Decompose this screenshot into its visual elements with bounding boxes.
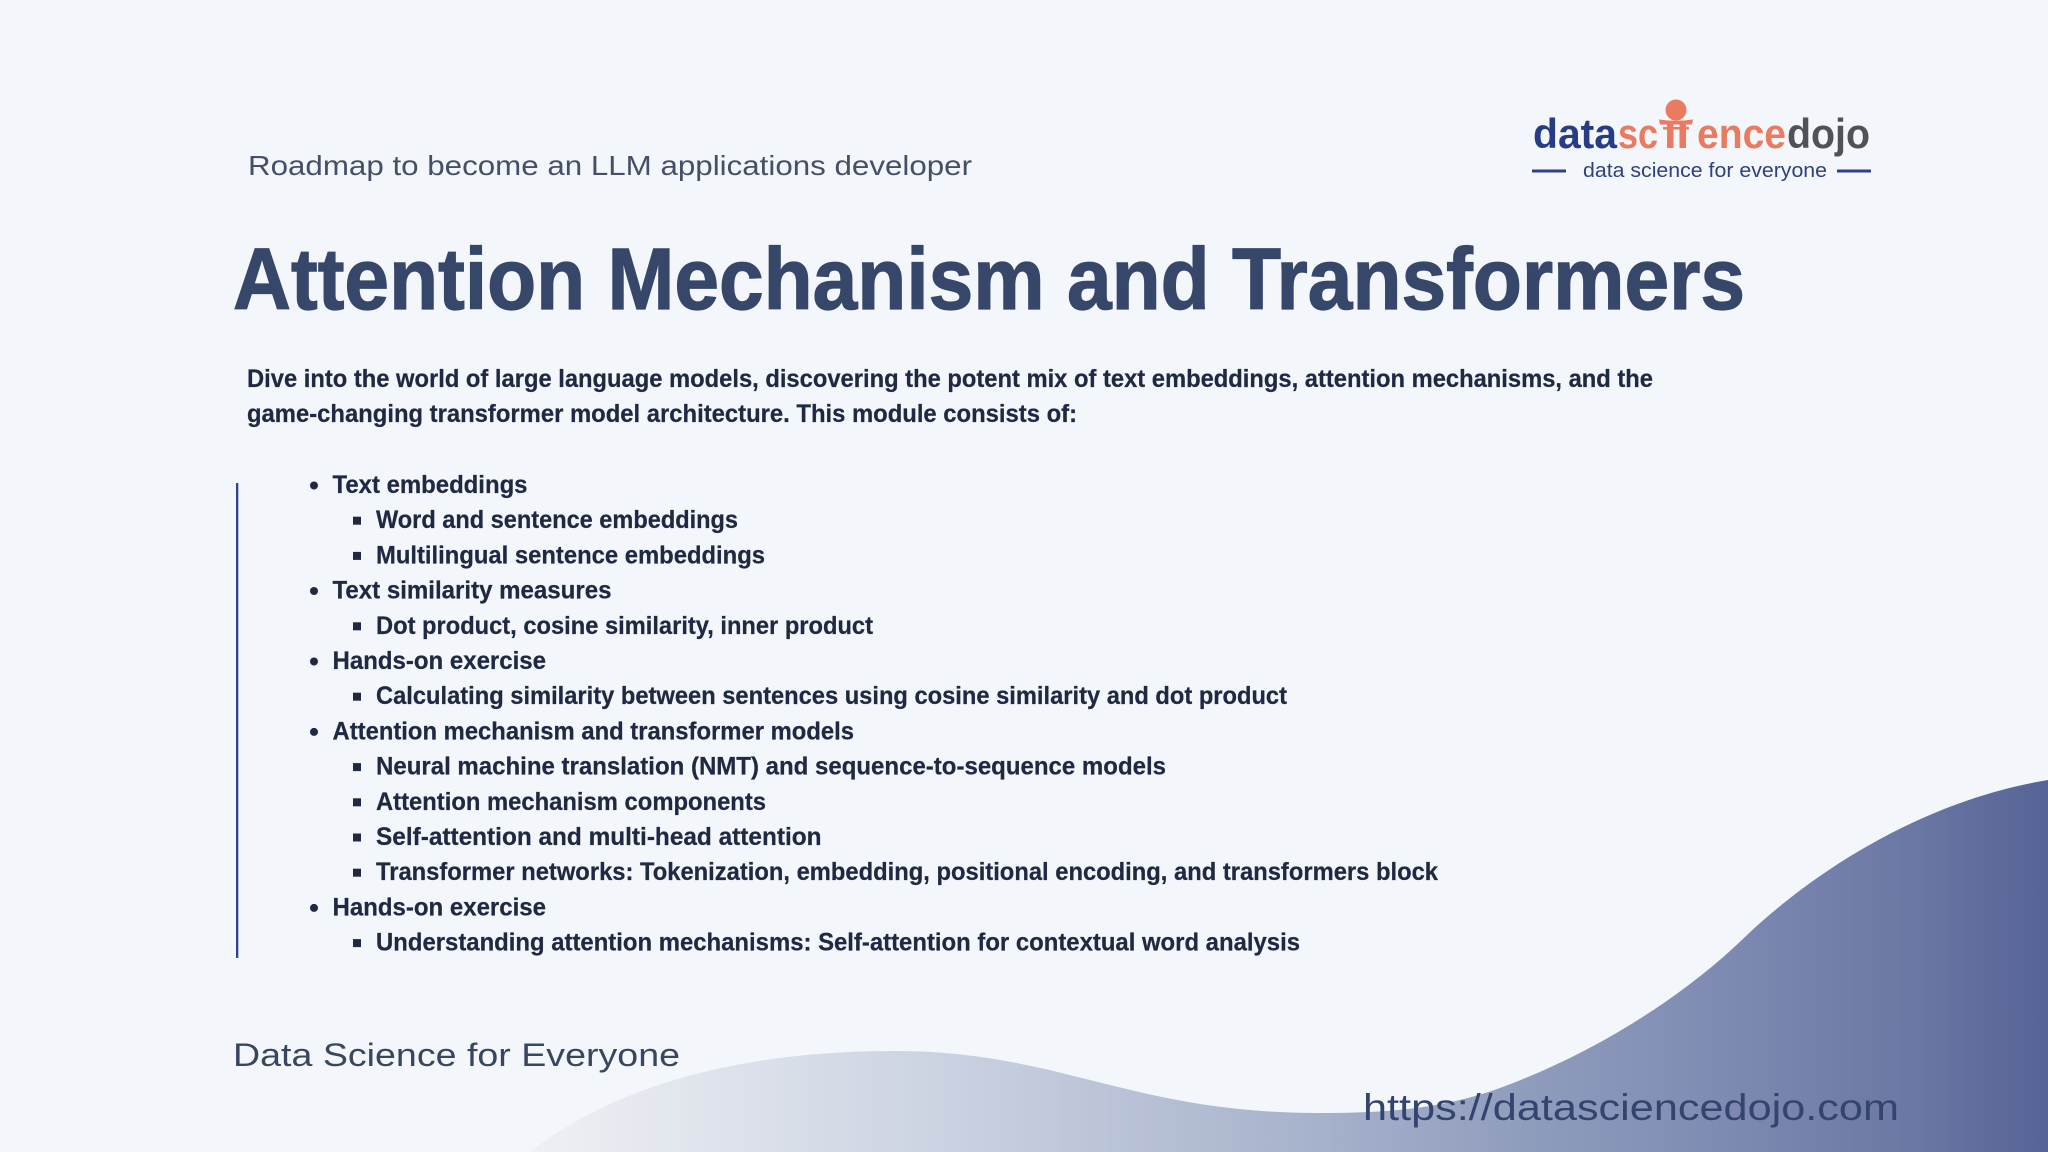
list items: Hands-on exercise — [332, 893, 546, 921]
bullets — [310, 482, 361, 947]
intro paragraph — [247, 365, 1653, 428]
list items: Understanding attention mechanisms: Self-attention for contextual word analysis — [376, 929, 1300, 957]
list items: Multilingual sentence embeddings — [376, 541, 765, 569]
logo wordmark: sc — [1618, 110, 1658, 157]
list items: Self-attention and multi-head attention — [376, 823, 822, 851]
footer url: https://datasciencedojo.com — [1363, 1087, 1899, 1128]
list items: Attention mechanism and transformer models — [332, 717, 854, 745]
footer tagline: Data Science for Everyone — [233, 1037, 680, 1073]
list items: Calculating similarity between sentences using cosine similarity and dot product — [376, 682, 1288, 710]
logo: data science dojo — [1532, 100, 1871, 182]
logo tagline rules — [1532, 170, 1871, 172]
logo torii gate icon — [1659, 100, 1693, 148]
logo tagline: data science for everyone — [1583, 160, 1827, 182]
list items: Neural machine translation (NMT) and sequence-to-sequence models — [376, 753, 1166, 781]
intro paragraph: Dive into the world of large language models, discovering the potent mix of text embeddings, attention mechanisms, and the — [247, 365, 1653, 393]
logo wordmark — [1533, 110, 1870, 157]
list items — [332, 471, 1438, 957]
intro paragraph: game-changing transformer model architecture. This module consists of: — [247, 400, 1077, 428]
list accent rule — [236, 483, 238, 958]
logo wordmark: data — [1533, 110, 1618, 157]
title: Attention Mechanism and Transformers — [233, 231, 1745, 328]
list items: Text similarity measures — [332, 577, 612, 605]
logo wordmark: dojo — [1787, 110, 1870, 157]
decorative wave — [530, 780, 2048, 1152]
logo wordmark: ence — [1697, 110, 1786, 157]
subtitle: Roadmap to become an LLM applications developer — [248, 150, 972, 181]
list items: Word and sentence embeddings — [376, 506, 738, 534]
list items: Attention mechanism components — [376, 788, 766, 816]
list items: Hands-on exercise — [332, 647, 546, 675]
list items: Text embeddings — [332, 471, 528, 499]
list items: Transformer networks: Tokenization, embedding, positional encoding, and transformers block — [376, 858, 1438, 886]
list items: Dot product, cosine similarity, inner product — [376, 612, 874, 640]
module outline list — [310, 471, 1438, 957]
